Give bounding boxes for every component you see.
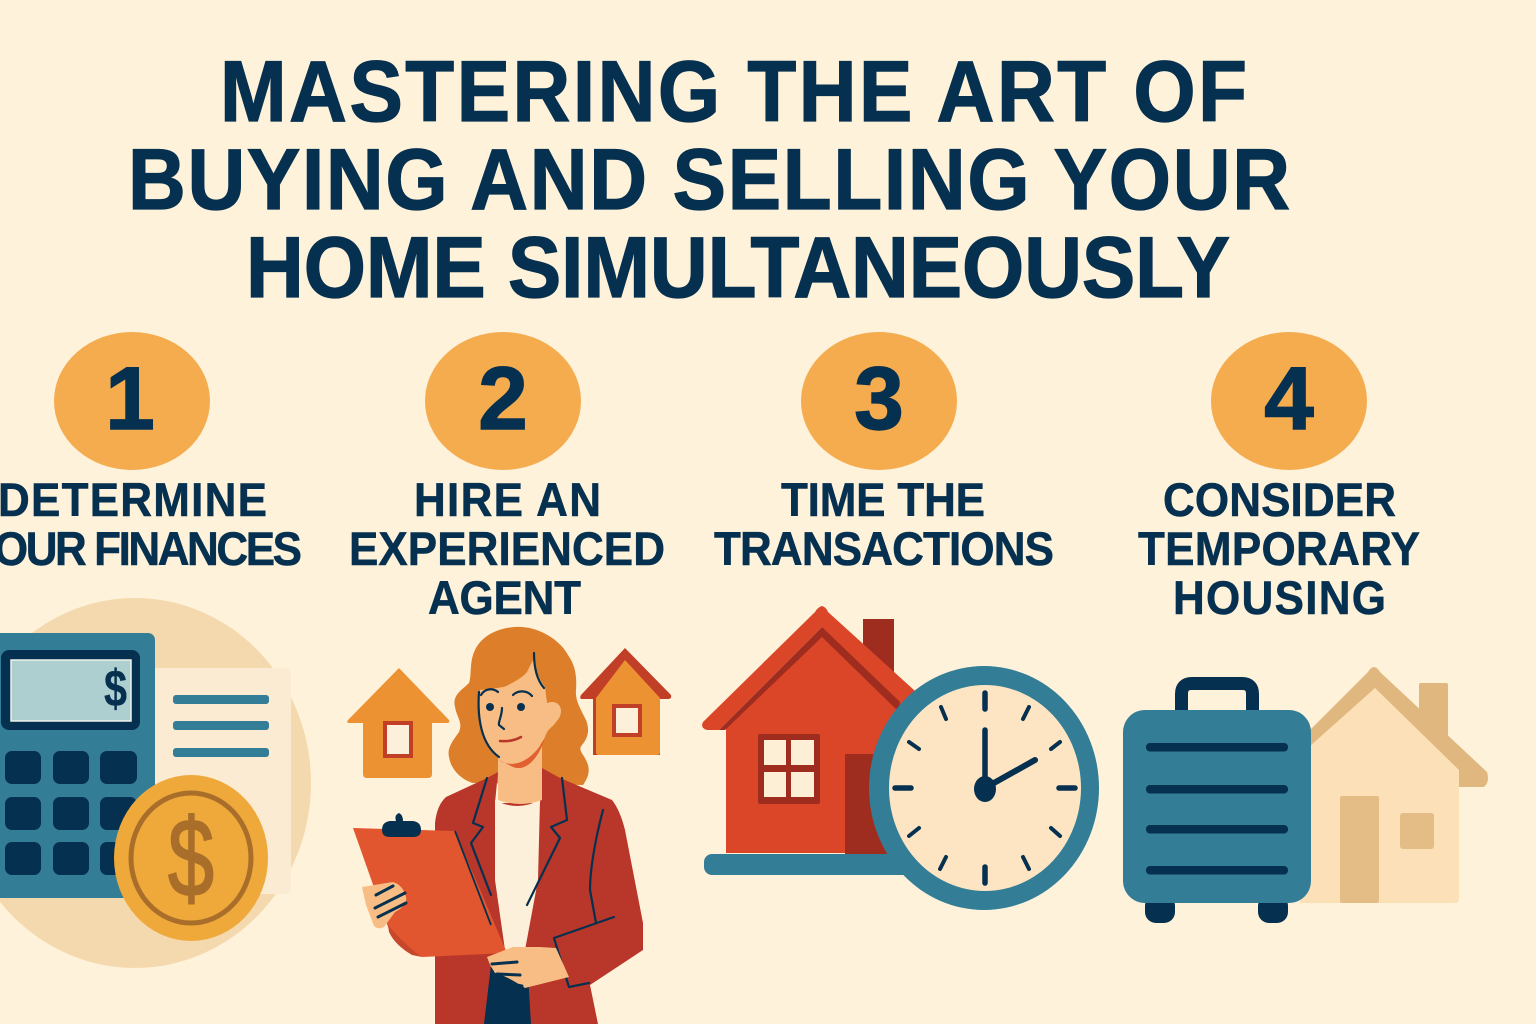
heading: hire an experienced agent: AGENT — [428, 572, 581, 624]
number badge 1: 1 — [105, 348, 155, 448]
number badge 1 — [54, 332, 210, 470]
icon: red house — [702, 606, 925, 875]
heading: hire an experienced agent — [349, 474, 665, 624]
heading: time the transactions: TIME THE — [781, 474, 985, 526]
heading: hire an experienced agent: HIRE AN — [414, 474, 601, 526]
icon: clock — [869, 666, 1099, 910]
heading: determine your finances — [0, 474, 302, 575]
number badge 3: 3 — [854, 348, 904, 448]
icon: tan house — [1300, 667, 1488, 903]
step 3: time the transactions — [702, 332, 1099, 910]
icon: calculator, document and coin: $ — [168, 797, 214, 920]
icon: small orange house right — [580, 648, 671, 755]
heading: consider temporary housing: TEMPORARY — [1138, 523, 1420, 575]
heading: time the transactions — [714, 474, 1054, 575]
icon: suitcase — [1123, 684, 1311, 923]
step 2: hire an experienced agent — [347, 332, 671, 1024]
title — [128, 43, 1290, 316]
number badge 2 — [425, 332, 581, 470]
icon: calculator, document and coin: $ — [104, 660, 127, 718]
title: HOME SIMULTANEOUSLY — [246, 219, 1230, 316]
illustration: real estate agent with clipboard — [353, 627, 643, 1024]
title: BUYING AND SELLING YOUR — [128, 131, 1290, 228]
number badge 3 — [801, 332, 957, 470]
number badge 4 — [1211, 332, 1367, 470]
icon: calculator, document and coin — [0, 598, 311, 968]
number badge 2: 2 — [478, 348, 528, 448]
step 1: determine your finances — [0, 332, 311, 968]
heading: time the transactions: TRANSACTIONS — [714, 523, 1054, 575]
heading: consider temporary housing: HOUSING — [1173, 572, 1386, 624]
title: MASTERING THE ART OF — [220, 43, 1247, 140]
heading: hire an experienced agent: EXPERIENCED — [349, 523, 665, 575]
heading: consider temporary housing: CONSIDER — [1163, 474, 1396, 526]
heading: determine your finances: DETERMINE — [0, 474, 267, 526]
icon: small orange house left — [347, 668, 449, 778]
heading: consider temporary housing — [1138, 474, 1420, 624]
number badge 4: 4 — [1264, 348, 1314, 448]
step 4: consider temporary housing — [1123, 332, 1488, 923]
